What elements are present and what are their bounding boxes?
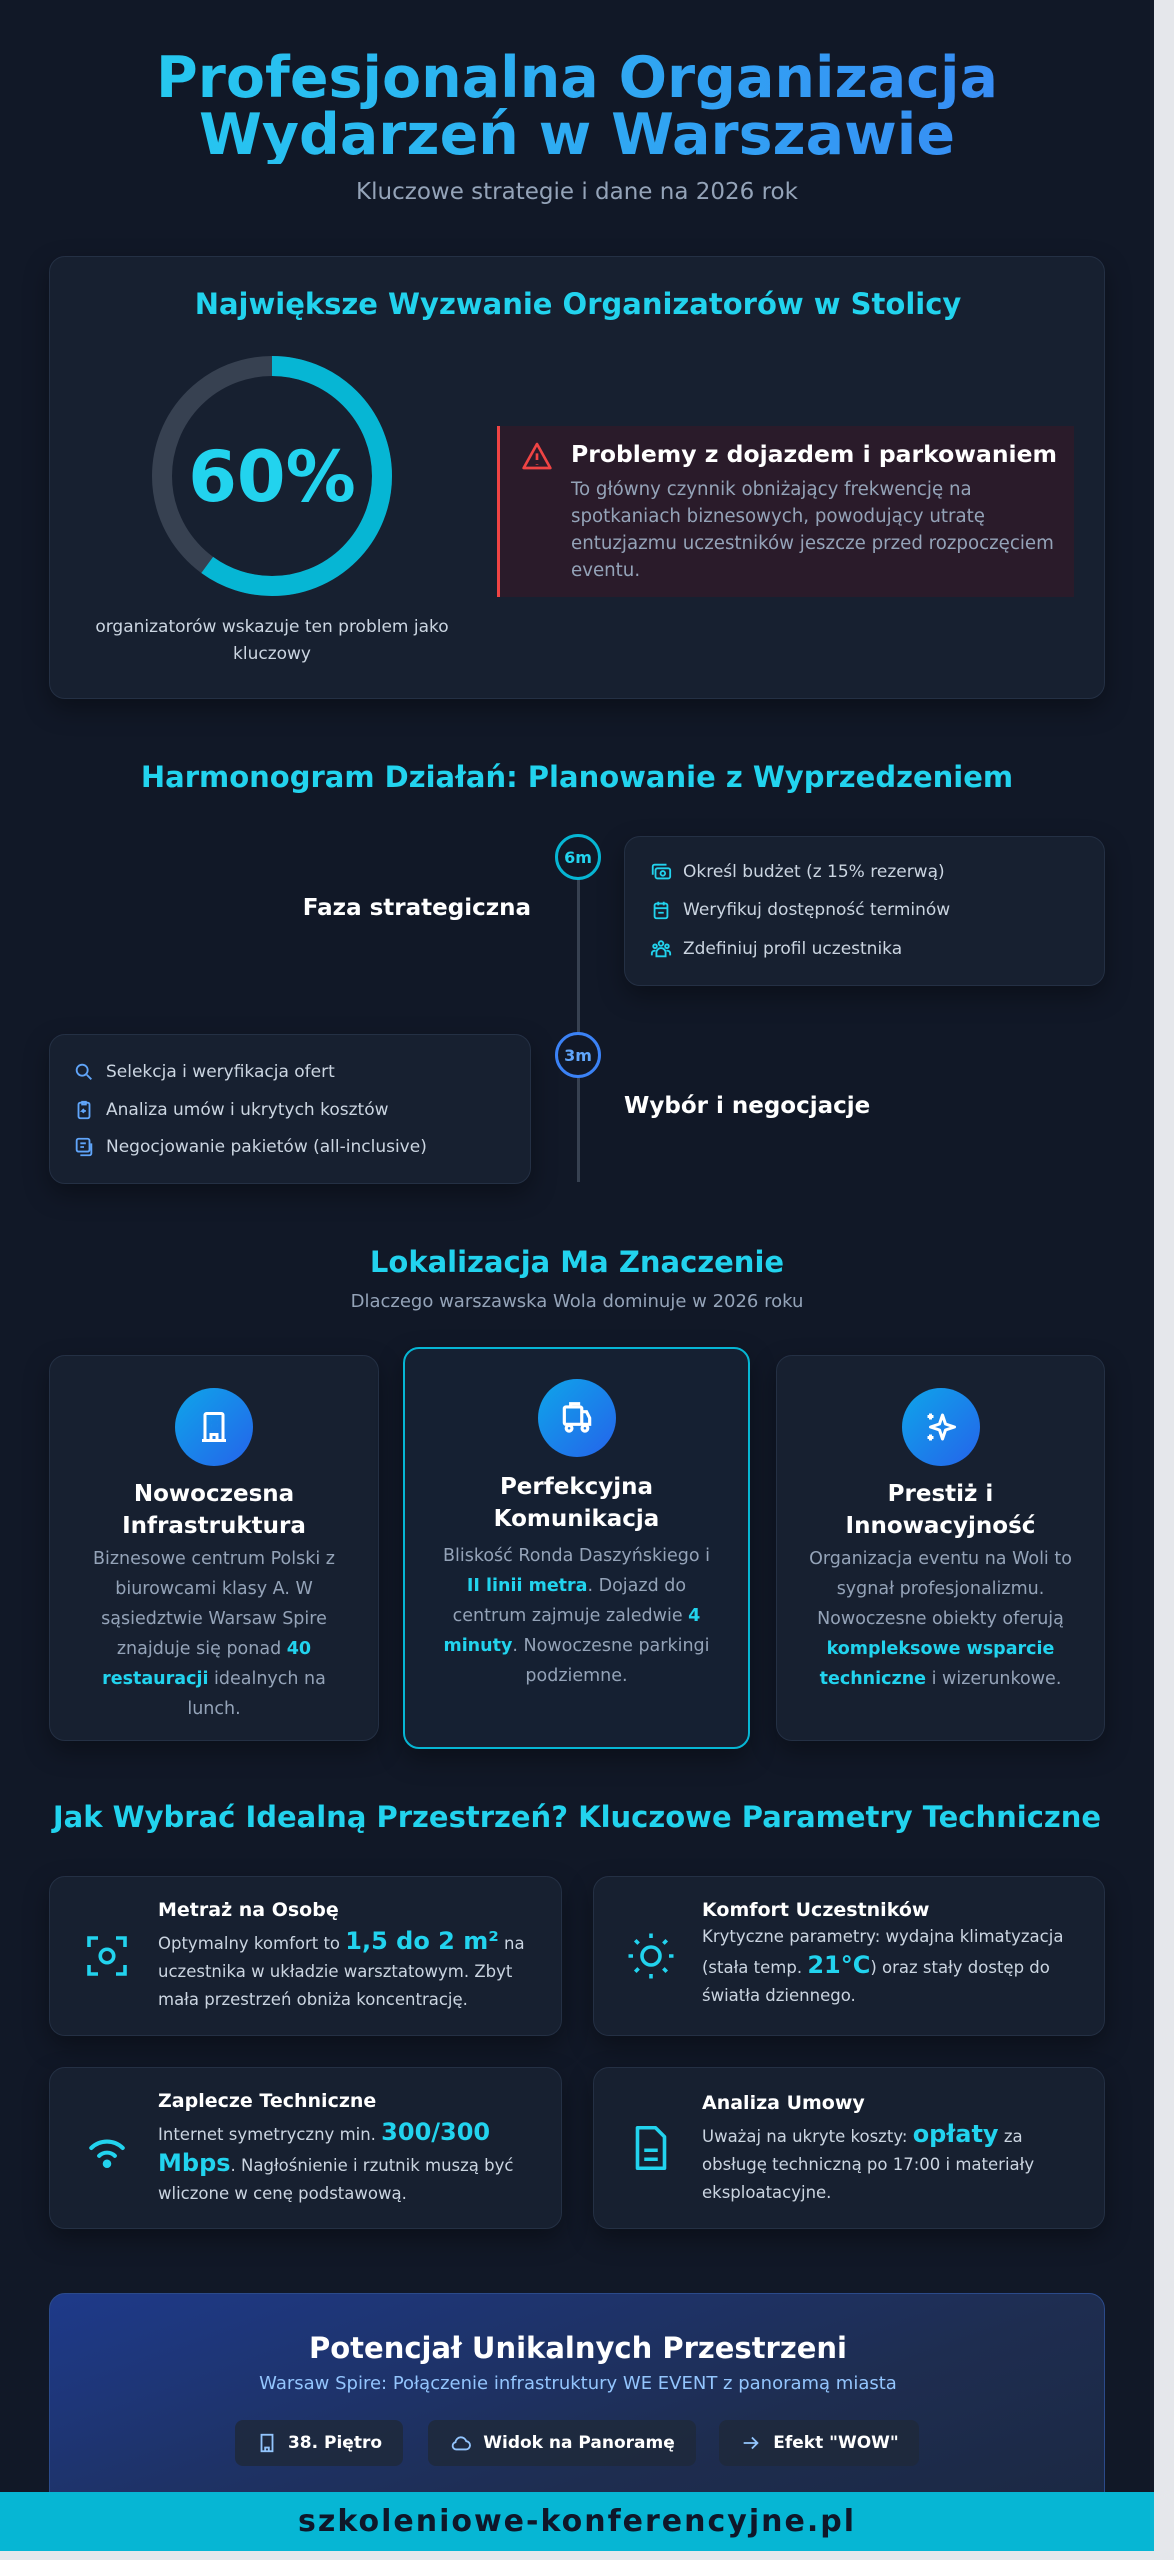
card: communication (highlighted): Perfekcyjna bbox=[500, 1474, 653, 1500]
card: communication (highlighted): Bliskość Ronda Daszyńskiego i II linii metra. Dojazd do centrum zajmuje zaledwie 4 minuty. Nowoczesne parkingi podziemne. bbox=[443, 1546, 710, 1686]
heading: timeline: Harmonogram Działań: Planowanie z Wyprzedzeniem bbox=[141, 760, 1013, 794]
subtitle: location: Dlaczego warszawska Wola dominuje w 2026 roku bbox=[351, 1291, 803, 1312]
phase label: strategic: Faza strategiczna bbox=[303, 895, 531, 921]
marker 3m bbox=[555, 1032, 601, 1078]
card: prestige: Prestiż i bbox=[888, 1481, 993, 1507]
icon: focus frame bbox=[87, 1936, 127, 1976]
footer bbox=[0, 2492, 1154, 2551]
icon: warning bbox=[522, 442, 552, 470]
marker 3m: 3m bbox=[564, 1046, 592, 1064]
item: packages: Negocjowanie pakietów (all-inclusive) bbox=[106, 1137, 427, 1157]
alert title: Problemy z dojazdem i parkowaniem bbox=[571, 440, 1057, 468]
panel title: Potencjał Unikalnych Przestrzeni bbox=[309, 2331, 847, 2365]
heading: location: Lokalizacja Ma Znaczenie bbox=[370, 1245, 784, 1279]
card: prestige: Organizacja eventu na Woli to sygnał profesjonalizmu. Nowoczesne obiekty oferują kompleksowe wsparcie techniczne i wizerunkowe. bbox=[809, 1549, 1072, 1689]
item: offers: Selekcja i weryfikacja ofert bbox=[106, 1062, 335, 1082]
heading: challenge: Największe Wyzwanie Organizatorów w Stolicy bbox=[195, 287, 961, 321]
chip: floor bbox=[235, 2420, 403, 2466]
subtitle: Kluczowe strategie i dane na 2026 rok bbox=[356, 179, 798, 205]
card: area per person bbox=[49, 1876, 562, 2036]
card: technical facilities: Internet symetryczny min. 300/300 Mbps. Nagłośnienie i rzutnik muszą być wliczone w cenę podstawową. bbox=[158, 2118, 513, 2203]
icon: sparkles bbox=[902, 1388, 980, 1466]
heading: technical parameters: Jak Wybrać Idealną Przestrzeń? Kluczowe Parametry Techniczne bbox=[53, 1800, 1101, 1834]
marker 6m: 6m bbox=[564, 848, 592, 866]
card: contract analysis: Analiza Umowy bbox=[702, 2092, 865, 2114]
card: comfort: Krytyczne parametry: wydajna klimatyzacja (stała temp. 21°C) oraz stały dostęp do światła dziennego. bbox=[702, 1927, 1063, 2005]
icon: sun bbox=[628, 1934, 674, 1978]
card: prestige bbox=[776, 1355, 1105, 1741]
donut chart 60%: 60% bbox=[188, 436, 356, 518]
card: communication (highlighted) bbox=[403, 1347, 750, 1749]
chip: panorama bbox=[428, 2420, 696, 2466]
card: technical facilities: Zaplecze Techniczne bbox=[158, 2090, 376, 2112]
panel: unique spaces bbox=[49, 2293, 1105, 2553]
timeline bbox=[303, 834, 870, 1182]
marker 6m bbox=[555, 834, 601, 880]
card: strategic tasks bbox=[624, 836, 1105, 986]
item: profile: Zdefiniuj profil uczestnika bbox=[683, 939, 902, 959]
alert text: To główny czynnik obniżający frekwencję na spotkaniach biznesowych, powodujący utratę entuzjazmu uczestników jeszcze przed rozpoczęciem eventu. bbox=[571, 479, 1054, 581]
chip: panorama: Widok na Panoramę bbox=[483, 2433, 675, 2453]
card: area per person: Metraż na Osobę bbox=[158, 1899, 339, 1921]
card: contract analysis: Uważaj na ukryte koszty: opłaty za obsługę techniczną po 17:00 i materiały eksploatacyjne. bbox=[702, 2120, 1034, 2202]
card: communication (highlighted): Komunikacja bbox=[494, 1506, 659, 1532]
card: contract analysis bbox=[593, 2067, 1105, 2229]
card: technical facilities bbox=[49, 2067, 562, 2229]
title bbox=[0, 50, 1154, 164]
card: comfort: Komfort Uczestników bbox=[702, 1899, 929, 1921]
card: prestige: Innowacyjność bbox=[846, 1513, 1035, 1539]
icon: wifi bbox=[89, 2140, 125, 2168]
panel subtitle: Warsaw Spire: Połączenie infrastruktury WE EVENT z panoramą miasta bbox=[259, 2373, 897, 2394]
title: Wydarzeń w Warszawie bbox=[199, 102, 955, 168]
alert box bbox=[497, 426, 1074, 597]
card: selection tasks bbox=[49, 1034, 531, 1184]
chip: wow: Efekt "WOW" bbox=[773, 2433, 899, 2453]
donut caption: organizatorów wskazuje ten problem jako kluczowy bbox=[95, 617, 449, 664]
phase label: selection: Wybór i negocjacje bbox=[624, 1093, 870, 1119]
card: infrastructure: Infrastruktura bbox=[122, 1513, 306, 1539]
icon: document bbox=[636, 2126, 666, 2170]
icon: building bbox=[175, 1388, 253, 1466]
icon: tram bbox=[538, 1379, 616, 1457]
card: area per person: Optymalny komfort to 1,5 do 2 m² na uczestnika w układzie warsztatowym. Zbyt mała przestrzeń obniża koncentrację. bbox=[158, 1927, 525, 2009]
chip: floor: 38. Piętro bbox=[288, 2433, 382, 2453]
panel: challenge bbox=[49, 256, 1105, 699]
chip: wow bbox=[719, 2420, 919, 2466]
card: infrastructure: Nowoczesna bbox=[134, 1481, 294, 1507]
item: budget: Określ budżet (z 15% rezerwą) bbox=[683, 862, 945, 882]
donut chart 60% bbox=[152, 356, 392, 596]
card: infrastructure: Biznesowe centrum Polski z biurowcami klasy A. W sąsiedztwie Warsaw Spire znajduje się ponad 40 restauracji idealnych na lunch. bbox=[93, 1549, 335, 1719]
card: infrastructure bbox=[49, 1355, 379, 1741]
title: Profesjonalna Organizacja bbox=[156, 45, 998, 111]
footer: szkoleniowe-konferencyjne.pl bbox=[298, 2504, 856, 2539]
card: comfort bbox=[593, 1876, 1105, 2036]
item: contracts: Analiza umów i ukrytych kosztów bbox=[106, 1100, 388, 1120]
item: dates: Weryfikuj dostępność terminów bbox=[683, 900, 950, 920]
